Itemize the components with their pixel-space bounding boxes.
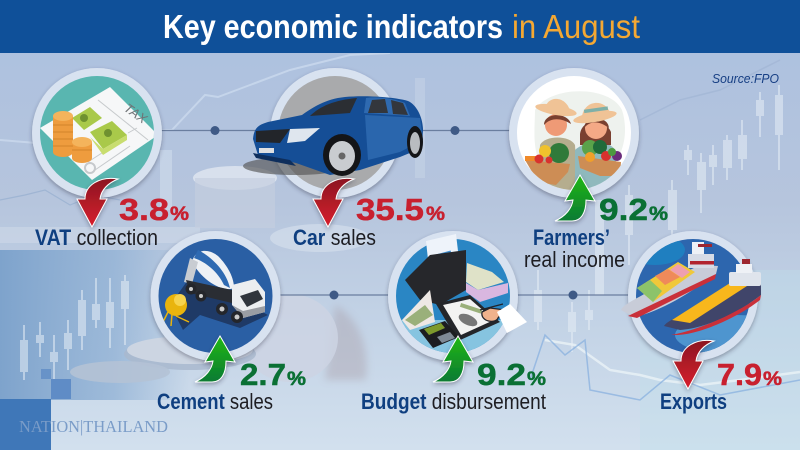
icon: farmers xyxy=(509,68,639,198)
icon: cement mixer truck xyxy=(150,231,280,361)
value: farmers: 9.2 xyxy=(599,192,648,227)
label: budget disbursement: Budget disbursement xyxy=(361,389,546,414)
value: budget: % xyxy=(527,369,546,390)
value: farmers xyxy=(599,192,668,227)
coin stacks backdrop xyxy=(70,166,370,383)
icon: VAT tax document xyxy=(32,68,162,198)
value: VAT: 3.8 xyxy=(119,192,169,227)
value: car: 35.5 xyxy=(356,192,424,227)
value: budget: 9.2 xyxy=(477,357,526,392)
arrow: cement up xyxy=(195,336,235,382)
value: car: % xyxy=(426,204,445,225)
title: Key economic indicators xyxy=(163,8,503,45)
label: farmers: Farmers’ xyxy=(533,225,610,250)
arrow: budget up xyxy=(433,336,473,382)
title highlight: in August xyxy=(512,8,640,45)
value: VAT: % xyxy=(170,204,189,225)
source note: Source:FPO xyxy=(712,72,779,86)
value: car xyxy=(356,192,445,227)
arrow: exports down xyxy=(673,340,714,389)
value: exports: 7.9 xyxy=(717,357,762,392)
icon: budget briefcase xyxy=(388,231,527,361)
value: exports: % xyxy=(763,369,782,390)
label: cement sales: Cement sales xyxy=(157,389,273,414)
value: cement: % xyxy=(287,369,306,390)
title bar xyxy=(0,0,800,53)
value: cement xyxy=(240,357,306,392)
value: budget xyxy=(477,357,546,392)
value: farmers: % xyxy=(649,204,668,225)
label: car sales: Car sales xyxy=(293,225,376,250)
label: VAT collection: VAT collection xyxy=(35,225,158,250)
label: exports: Exports xyxy=(660,389,727,414)
icon: car xyxy=(243,68,423,198)
icon: cargo ships xyxy=(621,230,761,364)
arrow: farmers up xyxy=(555,175,595,221)
value: exports xyxy=(717,357,782,392)
value: cement: 2.7 xyxy=(240,357,286,392)
icon: VAT tax document: TAX xyxy=(121,100,151,127)
connector lines xyxy=(160,126,632,300)
label: real income: real income xyxy=(524,247,625,272)
arrow: car down xyxy=(313,178,354,227)
logo: Nation Thailand: NATION|THAILAND xyxy=(19,417,168,436)
arrow: VAT down xyxy=(77,178,118,227)
value: VAT xyxy=(119,192,189,227)
